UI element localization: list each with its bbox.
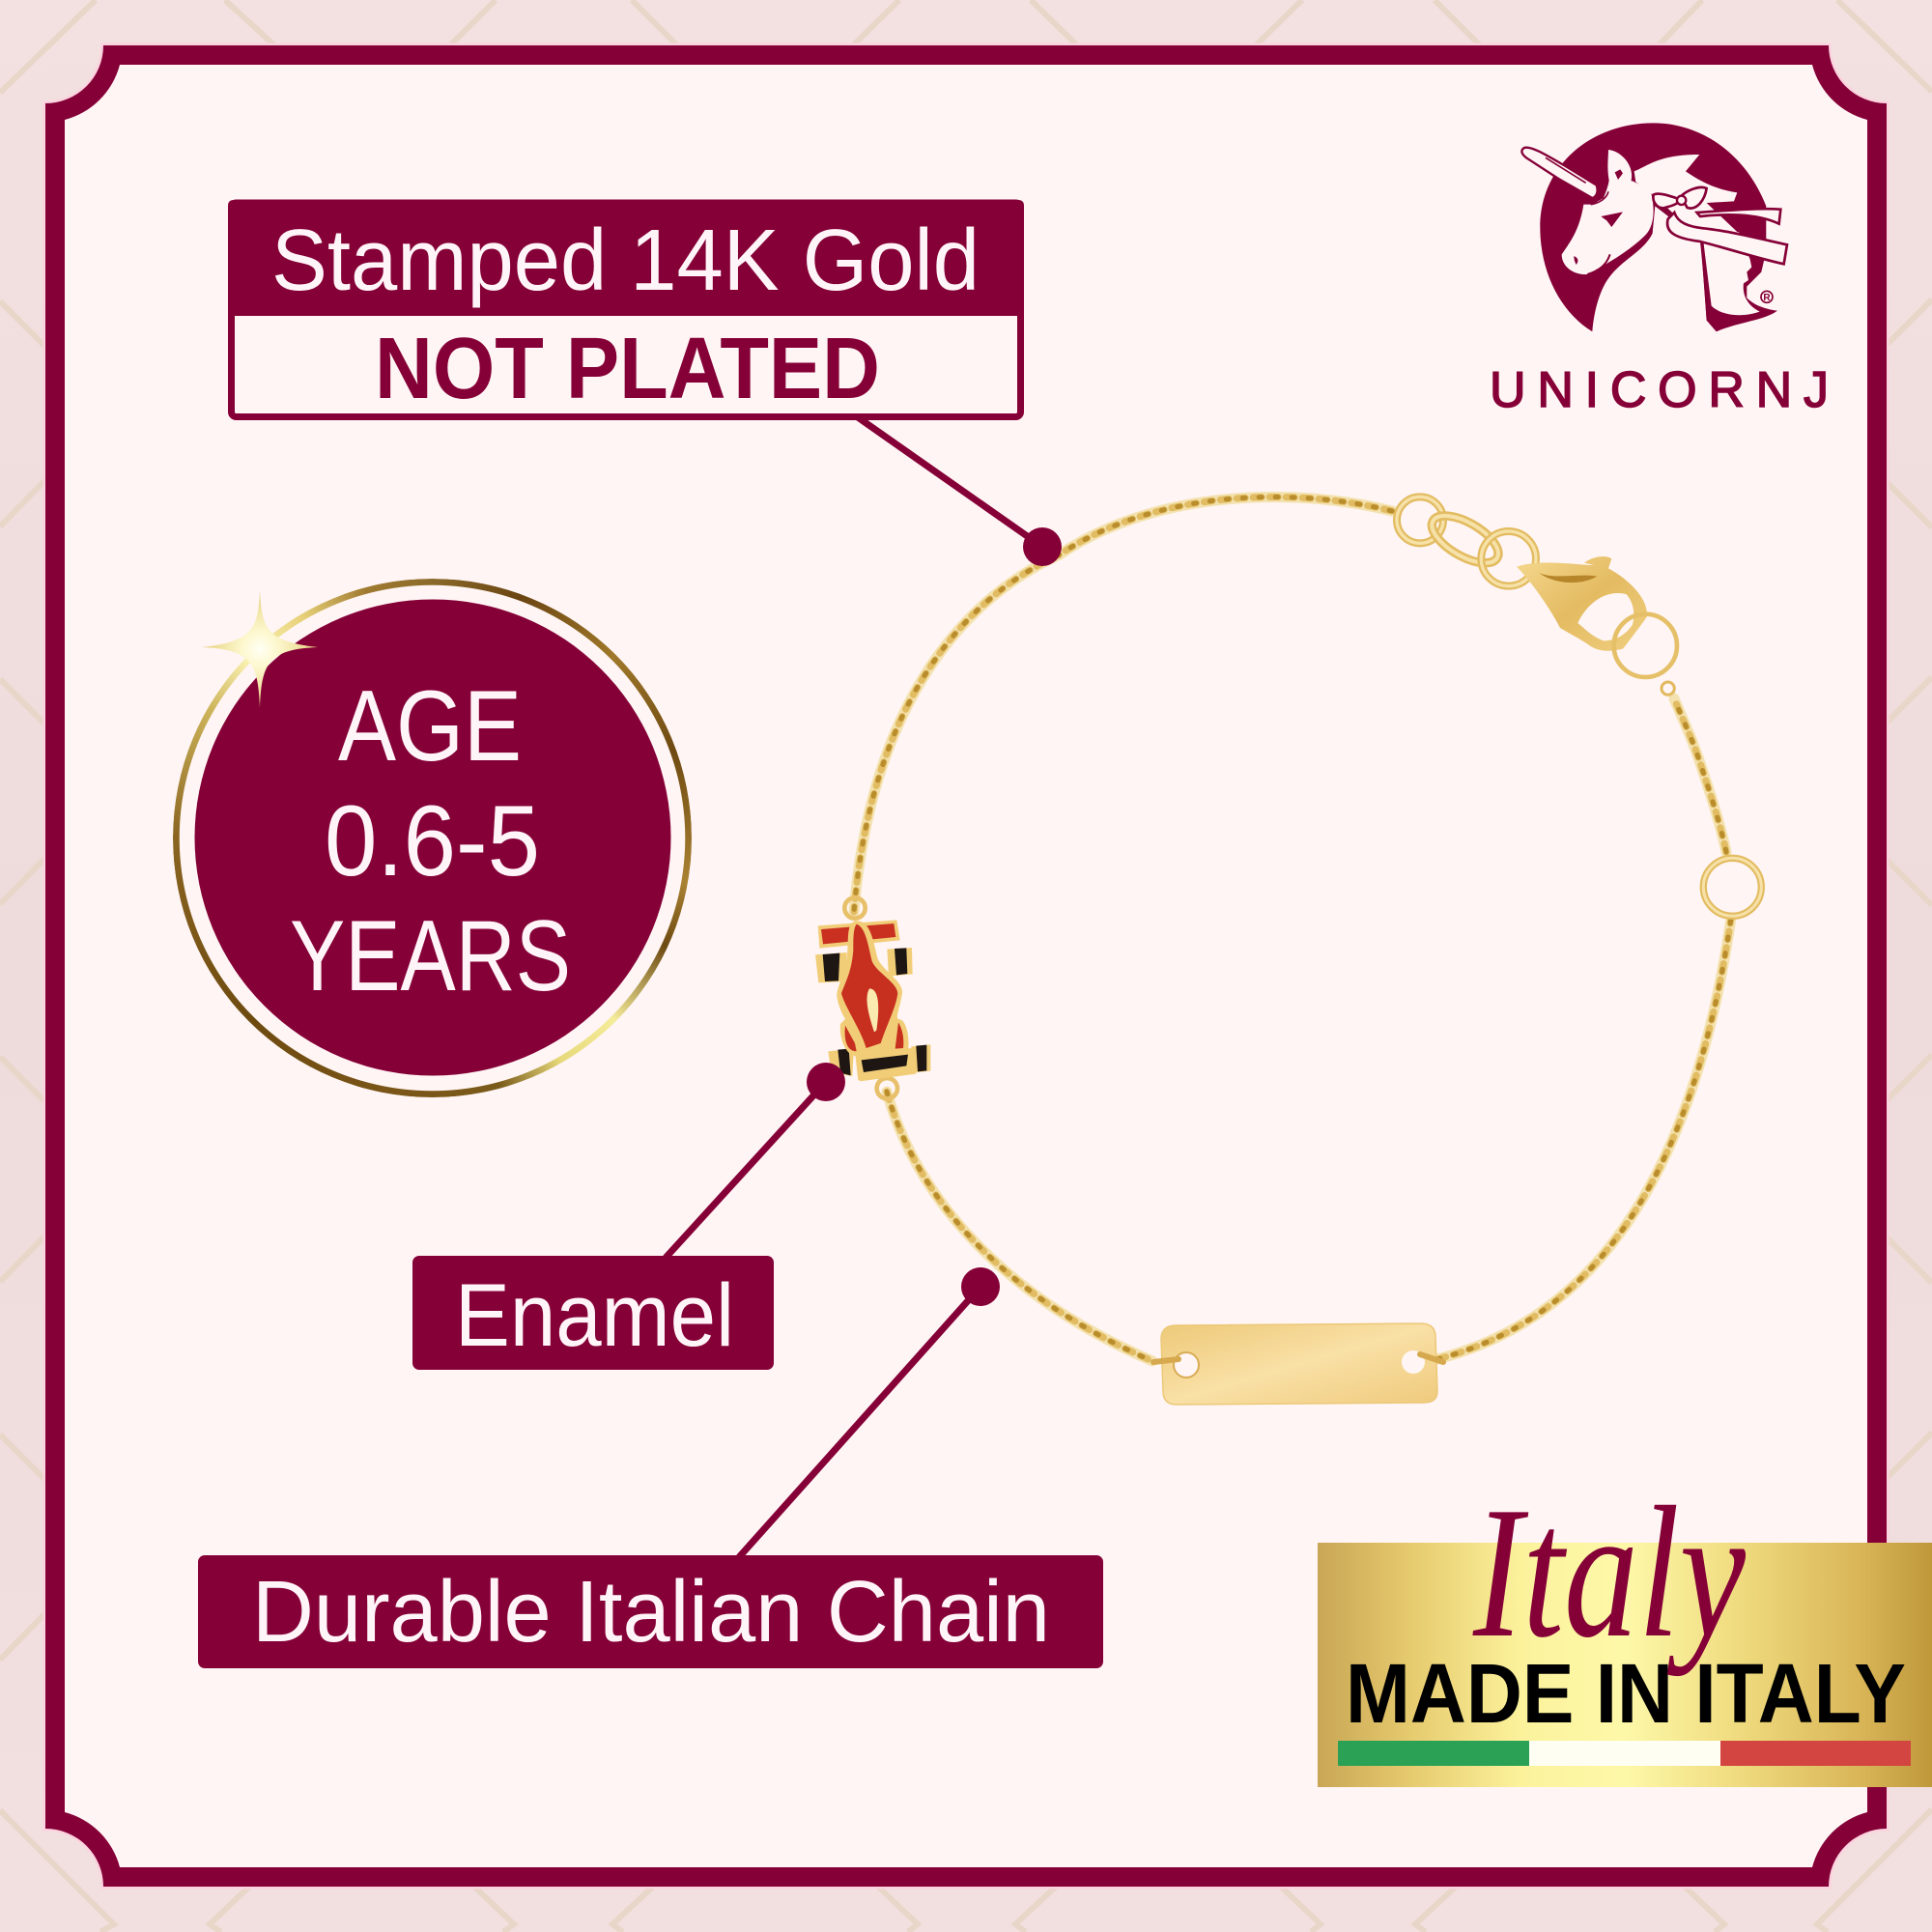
brand name: UNICORNJ: [1490, 362, 1829, 418]
burgundy disc: [195, 599, 670, 1076]
enamel label box: [412, 1256, 774, 1370]
bracelet: [815, 497, 1761, 1405]
label text top: Stamped 14K Gold: [271, 213, 980, 309]
callout 1: stamped gold: [228, 200, 1062, 566]
label header: [228, 200, 1024, 316]
unicorn emblem: [1521, 123, 1787, 331]
age line 2: 0.6-5: [325, 785, 540, 897]
race car charm: [815, 897, 930, 1098]
made in italy badge: [1318, 1468, 1932, 1787]
label frame: [232, 203, 1020, 417]
gold plate: [1318, 1543, 1932, 1787]
flag stripes: [1338, 1741, 1911, 1766]
leader line 2: [666, 1082, 826, 1258]
chain label box: [198, 1555, 1103, 1668]
clasp and rings: [1397, 497, 1761, 916]
dot 2: [807, 1063, 845, 1101]
age badge: [173, 579, 692, 1097]
icon: sparkle: [202, 590, 318, 708]
gold ring: [173, 579, 692, 1097]
callout 2: enamel: [412, 1063, 845, 1370]
enamel label text: Enamel: [455, 1266, 734, 1365]
logo: [1490, 123, 1829, 418]
age line 3: YEARS: [290, 900, 571, 1012]
chain: [854, 497, 1731, 1361]
age line 1: AGE: [338, 670, 522, 782]
chain label text: Durable Italian Chain: [252, 1564, 1050, 1661]
script word: Italy: [1472, 1468, 1746, 1677]
name tag: [1153, 1323, 1443, 1405]
dot 3: [961, 1267, 1000, 1306]
unicorn emblem: R: [1763, 293, 1771, 303]
dot 1: [1023, 527, 1062, 566]
leader line 1: [858, 417, 1042, 547]
leader line 3: [739, 1287, 980, 1557]
label text bottom: NOT PLATED: [375, 321, 880, 417]
callout 3: chain: [198, 1267, 1103, 1668]
